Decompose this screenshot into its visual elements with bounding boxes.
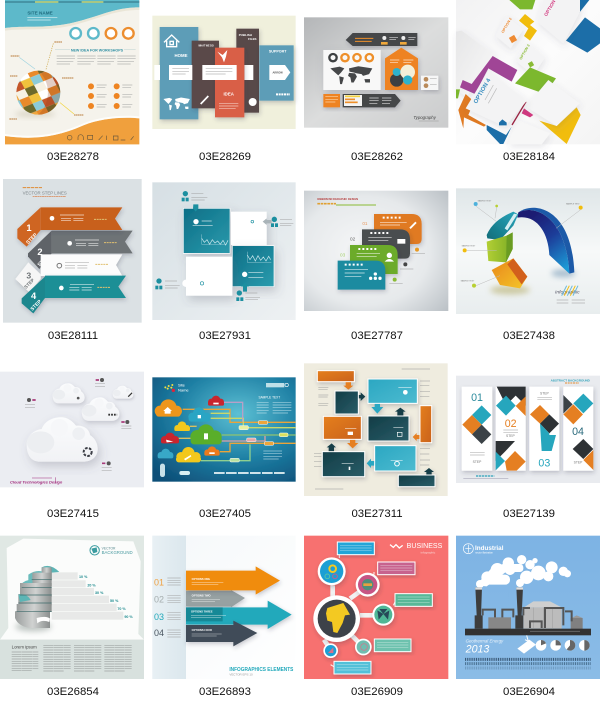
green cloud	[190, 424, 222, 444]
box icons	[348, 390, 408, 470]
cloud design caption: Cloud Technologies Design	[10, 480, 63, 485]
panel: 03E27787 stacked cards thumbnail	[304, 191, 448, 311]
step numbers: 04	[154, 628, 164, 638]
step numbers: 01	[362, 221, 368, 226]
step 2 ribbon: STEP	[37, 254, 50, 268]
orange cloud	[155, 399, 182, 417]
site name logo: Site	[178, 383, 186, 388]
percent labels: 90 %	[124, 615, 133, 619]
globe hub	[313, 595, 360, 642]
percent labels	[79, 575, 133, 619]
purple tab	[460, 56, 517, 94]
panel: 03E26909 business coral thumbnail: infographic	[421, 550, 436, 554]
column 1: 01	[471, 392, 483, 404]
orange segment	[492, 258, 527, 288]
icon: bird	[217, 50, 227, 62]
small white card	[421, 76, 438, 90]
site name heading: SITE NAME	[27, 11, 53, 16]
dark arrow bar	[343, 94, 401, 107]
panel: 03E26904 industrial blue thumbnail: 2013	[465, 644, 489, 656]
green circle	[372, 604, 394, 626]
support banner	[259, 45, 294, 101]
star rows	[345, 218, 403, 265]
patchwork globe	[14, 71, 60, 117]
logo and heading: sector illustration	[475, 551, 494, 554]
step numbers: 02	[154, 595, 164, 605]
dark arrow	[186, 621, 257, 646]
banner labels: SUPPORT	[269, 49, 287, 53]
panel: 03E28111 step ribbons thumbnail	[3, 179, 142, 323]
logo: VECTOR	[102, 547, 116, 551]
step 4 ribbon: STEP	[30, 298, 43, 312]
labels row 4: 03E26904	[503, 686, 555, 698]
labels row 1: 03E28278	[47, 151, 99, 163]
callout dots and labels	[461, 200, 583, 288]
icon: house	[164, 35, 179, 47]
search box	[266, 383, 284, 387]
labels row 4	[47, 686, 555, 698]
panel: 03E27311 arrow boxes thumbnail	[304, 363, 448, 496]
teal header wave	[5, 0, 139, 28]
cloud icons	[163, 403, 219, 460]
panel: 03E28184 rotated squares thumbnail	[456, 0, 600, 144]
idea banner	[215, 48, 244, 117]
ribbon text and icons	[50, 215, 117, 290]
percent bars	[52, 572, 123, 620]
lower card	[508, 120, 550, 144]
factory	[465, 587, 591, 635]
orange arrow	[186, 566, 280, 595]
top white card	[537, 0, 580, 43]
panel: 03E28278 web layout thumbnail	[5, 0, 139, 144]
signature caption: Typography	[413, 115, 437, 120]
orange tab	[458, 94, 486, 128]
bubble chart	[390, 65, 415, 87]
orange list icons	[88, 83, 120, 109]
step numbers: 03	[154, 612, 164, 622]
callout dots and labels: SAMPLE TEXT	[461, 280, 475, 283]
column 3: 03	[538, 457, 550, 469]
callout lines	[46, 43, 53, 69]
site name logo: Name	[178, 387, 189, 392]
large gray card	[456, 31, 494, 97]
panel: 03E26909 business coral thumbnail	[304, 536, 448, 679]
yellow tab	[519, 14, 537, 41]
text box pink	[378, 562, 415, 575]
line nodes	[230, 421, 288, 462]
green tab	[509, 0, 535, 9]
orange cloud lower	[204, 446, 220, 456]
dark box center	[368, 408, 409, 441]
heading: ABSTRACT BACKGROUND	[551, 378, 591, 382]
connectors	[324, 585, 374, 646]
orange box top	[317, 371, 354, 390]
percent labels: 30 %	[95, 591, 104, 595]
ground shadows	[490, 285, 530, 295]
option titles: OPTIONS FOUR	[192, 628, 212, 632]
step 1 ribbon: 1	[26, 223, 32, 233]
labels row 2: 03E27438	[503, 330, 555, 342]
3D spiral stairs	[15, 566, 59, 631]
light card	[526, 80, 579, 126]
pink strip	[522, 108, 533, 117]
column 2	[496, 387, 526, 471]
gray arrow	[186, 590, 245, 607]
teal square bottom	[232, 246, 274, 287]
column 2: 02	[505, 418, 517, 430]
white square bottom	[186, 257, 232, 296]
panel: 03E26893 arrows options thumbnail	[152, 536, 296, 679]
column 4	[563, 387, 593, 471]
arrows	[193, 204, 198, 212]
yellow square	[539, 107, 581, 144]
publish files banner	[236, 29, 259, 113]
smoke clouds	[476, 555, 571, 588]
step numbers	[340, 221, 368, 258]
world map	[330, 66, 372, 84]
panel: 03E28184 rotated squares thumbnail: OPTION 3	[519, 44, 531, 60]
labels row 3: 03E27311	[351, 508, 403, 520]
panel: 03E27438 3D arch thumbnail	[456, 188, 600, 314]
green segment	[487, 232, 513, 262]
panel: 03E26893 arrows options thumbnail: VECTOR EPS 10	[229, 673, 253, 677]
white square top	[231, 212, 267, 245]
step 3 ribbon: STEP	[23, 278, 35, 290]
heading: RIBBON INFOGRAPHIC DESIGN	[317, 197, 358, 201]
green card	[350, 245, 398, 274]
labels row 2: 03E27787	[351, 330, 403, 342]
caption	[315, 369, 430, 489]
text columns	[12, 645, 132, 671]
text box mint	[374, 639, 411, 652]
yellow cloud lower	[176, 447, 201, 462]
orange house panel	[385, 48, 418, 90]
footer nav	[214, 470, 285, 475]
year heading: Geothermal Energy	[466, 638, 504, 643]
green tab	[515, 67, 556, 94]
dark box lower left	[322, 443, 365, 477]
column 1: STEP	[473, 460, 482, 464]
panel: 03E28269 vertical banners thumbnail	[152, 16, 296, 129]
banner labels	[174, 33, 287, 97]
step 2 ribbon: 2	[37, 247, 43, 257]
top cloud	[53, 383, 85, 403]
line chart	[202, 238, 228, 245]
option titles: OPTIONS TWO	[192, 594, 211, 598]
title: INFOGRAPHICS ELEMENTS	[229, 667, 293, 673]
icon: globe	[249, 98, 257, 106]
panel: 03E27415 white clouds thumbnail	[0, 372, 144, 487]
percent labels: 20 %	[87, 583, 96, 587]
step 2 ribbon	[28, 231, 133, 269]
footer icon row	[67, 135, 134, 140]
medium cloud	[82, 397, 119, 421]
column 3: STEP	[540, 391, 549, 395]
blue arch	[517, 208, 574, 274]
donut progress rings	[70, 28, 134, 39]
step 4 ribbon: 4	[31, 291, 37, 301]
blue square	[566, 17, 600, 53]
labels row 1	[47, 151, 555, 163]
orange note box	[323, 94, 340, 107]
red cloud	[208, 396, 224, 406]
infographic logo	[555, 286, 585, 303]
option titles	[191, 577, 213, 632]
callout dots and labels: SAMPLE TEXT	[566, 202, 580, 205]
blue box top	[368, 379, 417, 414]
labels row 4: 03E26909	[351, 686, 403, 698]
banner labels: WHAT WE DO	[198, 44, 214, 47]
lorem ipsum heading: Lorem ipsum	[12, 645, 37, 650]
left column	[152, 536, 186, 679]
dark box bottom	[398, 468, 435, 487]
home banner	[160, 27, 198, 119]
icon: home	[499, 119, 507, 125]
option titles: OPTIONS ONE	[192, 577, 210, 581]
banner labels: HOME	[174, 53, 188, 58]
callout markers	[25, 378, 131, 470]
labels row 1: 03E28269	[199, 151, 251, 163]
panel: 03E27139 diamonds columns thumbnail	[456, 376, 600, 483]
logo and heading: Industrial	[475, 545, 504, 552]
heading	[23, 186, 42, 189]
blue circle	[323, 643, 338, 658]
red cloud lower	[161, 433, 179, 443]
teal square top	[183, 208, 230, 253]
column 2: STEP	[506, 434, 515, 438]
orange box left	[323, 416, 361, 448]
icon: world map	[163, 98, 190, 110]
step numbers: 01	[154, 577, 164, 587]
sample text heading: SAMPLE TEXT	[258, 396, 280, 400]
labels row 4: 03E26854	[47, 686, 99, 698]
pill widgets	[160, 464, 165, 477]
column 1	[462, 387, 492, 471]
step 1 ribbon	[17, 207, 122, 247]
what we do banner	[192, 41, 219, 108]
blue tab	[487, 125, 512, 144]
panel: 03E28184 rotated squares thumbnail: OPTION 2	[501, 17, 513, 34]
teal segment	[487, 212, 518, 240]
blue box lower	[367, 446, 416, 471]
header	[390, 545, 403, 548]
teal card	[338, 261, 385, 290]
logo and heading	[463, 544, 504, 554]
section heading: NEW IDEA FOR WORKSHOPS	[71, 48, 124, 52]
yellow cloud	[174, 421, 190, 431]
banner labels: PUBLISH	[239, 33, 252, 37]
icon: isometric crate	[517, 640, 536, 654]
step 3 ribbon: 3	[26, 270, 31, 280]
logo: BACKGROUND	[102, 550, 133, 555]
blue cloud	[158, 449, 173, 458]
labels row 3: 03E27405	[199, 508, 251, 520]
large cloud	[27, 417, 98, 462]
small cloud	[113, 386, 133, 399]
percent labels: 70 %	[117, 607, 126, 611]
small markers	[415, 248, 419, 252]
dark card	[362, 229, 410, 259]
banner labels: FILES	[248, 37, 257, 41]
pink circle	[356, 573, 380, 597]
logo	[90, 546, 133, 555]
infographic logo: Infographic	[555, 289, 580, 295]
panel: 03E26909 business coral thumbnail: BUSINESS	[407, 543, 443, 550]
dark tag banner	[346, 33, 417, 46]
teal cloud	[188, 407, 211, 422]
panel: 03E28184 rotated squares thumbnail: OPTION 4	[473, 77, 493, 105]
panel: 03E27405 colored clouds network thumbnail	[152, 377, 296, 482]
column 4: STEP	[574, 461, 583, 465]
percent labels: 10 %	[79, 575, 88, 579]
callout dots and labels: SAMPLE TEXT	[462, 245, 476, 248]
people pictogram rows	[465, 659, 591, 668]
small orange card	[496, 16, 523, 48]
text box blue	[337, 542, 374, 555]
panel: 03E27931 teal squares thumbnail	[152, 182, 296, 320]
site name logo	[164, 383, 189, 392]
labels row 4: 03E26893	[199, 686, 251, 698]
labels row 3: 03E27139	[503, 508, 555, 520]
white ribbon	[154, 65, 290, 80]
labels row 2: 03E27931	[199, 330, 251, 342]
banner labels: IDEA	[223, 92, 235, 97]
step 3 ribbon	[15, 254, 122, 292]
orange vertical box	[413, 406, 432, 443]
panel: 03E28111 step ribbons thumbnail: VECTOR STEP LINES	[23, 190, 67, 195]
option 4 card	[466, 71, 527, 127]
circuit lines	[178, 402, 296, 461]
step numbers	[154, 577, 164, 638]
white map panel	[323, 50, 381, 90]
teal arrow	[186, 601, 292, 629]
donut rings	[329, 54, 373, 61]
column 4: 04	[572, 426, 584, 438]
bars	[345, 94, 360, 99]
pie charts	[536, 640, 590, 651]
small green card	[515, 43, 545, 75]
labels row 2: 03E28111	[48, 330, 98, 342]
step 4 ribbon	[22, 276, 126, 313]
dark box 1	[335, 391, 365, 414]
step numbers: 02	[350, 237, 356, 242]
orange card	[374, 214, 422, 244]
panel: 03E26904 industrial blue thumbnail	[456, 536, 600, 679]
callout dots and labels: SAMPLE TEXT	[478, 200, 492, 203]
teal circle	[355, 639, 372, 655]
labels row 3: 03E27415	[47, 508, 99, 520]
card icons	[369, 222, 417, 280]
step numbers: 03	[340, 253, 346, 258]
labels row 1: 03E28262	[351, 151, 403, 163]
step 1 ribbon: STEP	[25, 232, 39, 246]
gears circle	[318, 557, 346, 585]
text box green	[395, 594, 432, 606]
labels row 3	[47, 508, 555, 520]
icon: pen	[201, 96, 208, 104]
panel: 03E28262 gray dashboard thumbnail	[304, 17, 448, 128]
labels row 2	[48, 330, 555, 342]
panel: 03E26854 3D stairs chart thumbnail	[0, 536, 144, 679]
orange footer wave	[5, 118, 139, 144]
text box light blue	[334, 661, 371, 674]
column 3	[529, 387, 559, 471]
white brushed center	[0, 539, 144, 640]
labels row 1: 03E28184	[503, 151, 555, 163]
option titles: OPTIONS THREE	[191, 610, 213, 614]
percent labels: 50 %	[110, 599, 119, 603]
panel: 03E28269 vertical banners thumbnail: ARROW	[272, 70, 283, 74]
lower band	[0, 640, 144, 679]
callout icons	[155, 191, 278, 301]
footer bar	[476, 474, 494, 478]
